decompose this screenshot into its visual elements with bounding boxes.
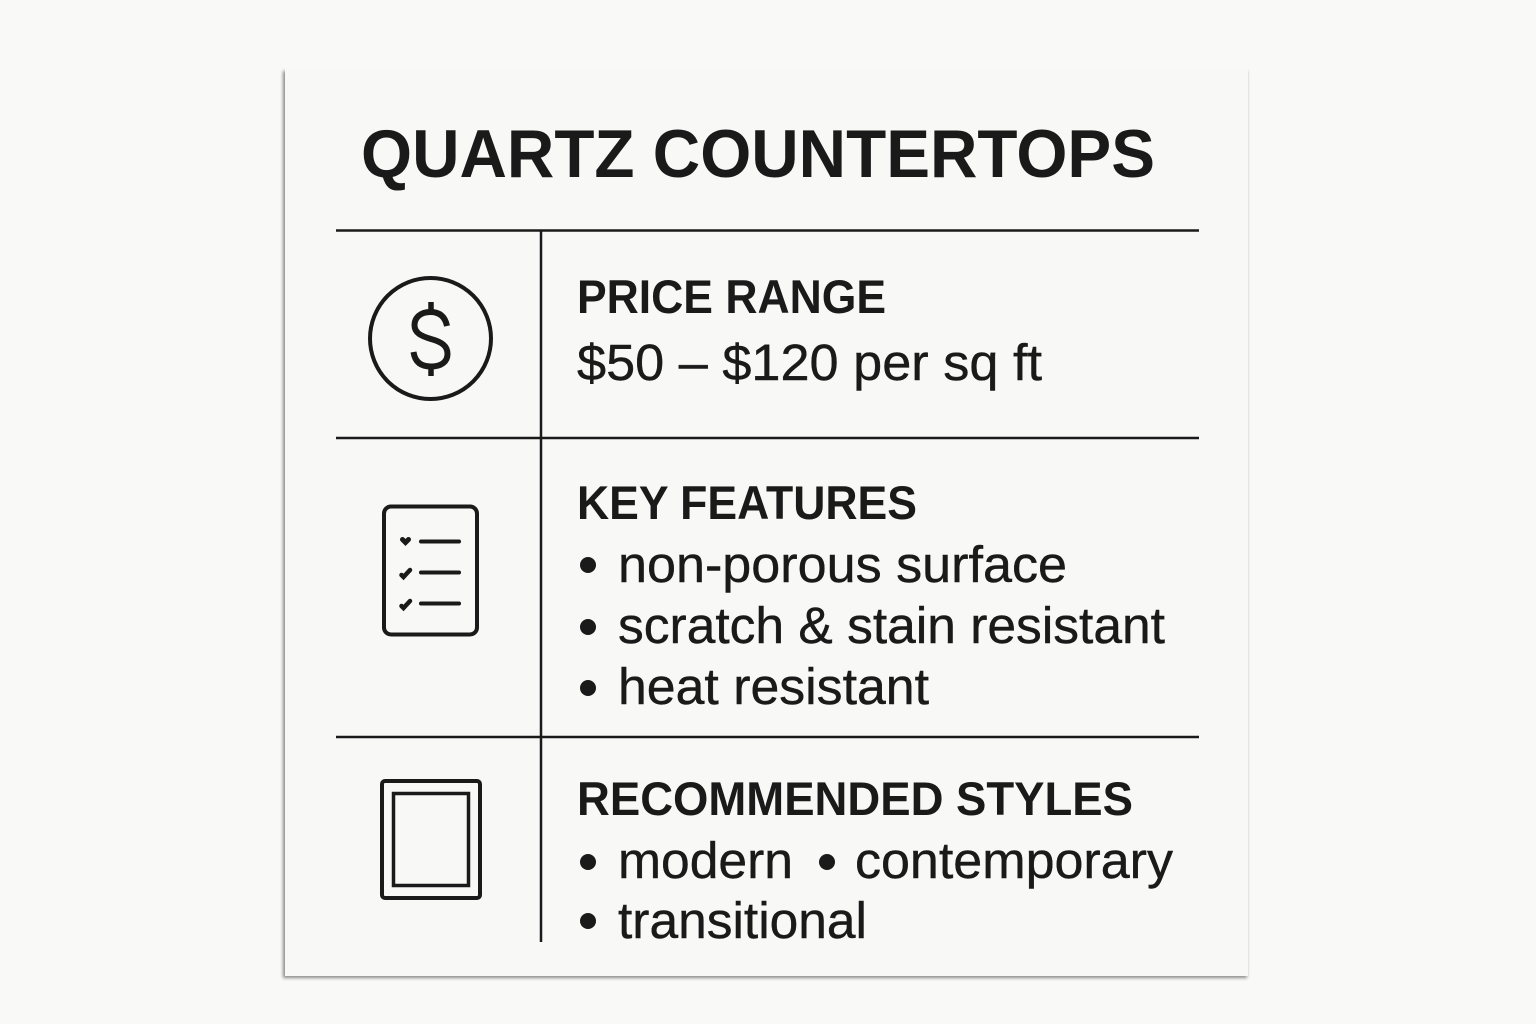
list: styles: modern <box>618 832 793 889</box>
icon: checklist <box>384 506 477 634</box>
list: styles: contemporary <box>855 832 1173 889</box>
heading: price range: PRICE RANGE <box>577 270 886 323</box>
icon: frame <box>382 781 480 898</box>
list: features: heat resistant <box>618 658 929 715</box>
panel: card <box>285 67 1248 976</box>
list: styles: transitional <box>618 892 867 949</box>
icon: dollar coin <box>370 278 491 399</box>
title: QUARTZ COUNTERTOPS <box>361 116 1155 192</box>
text: price value: $50 – $120 per sq ft <box>577 334 1042 391</box>
heading: key features: KEY FEATURES <box>577 476 917 529</box>
list: features: scratch & stain resistant <box>618 597 1165 654</box>
list: features <box>580 536 1165 715</box>
heading: recommended styles: RECOMMENDED STYLES <box>577 772 1133 825</box>
list: features: non-porous surface <box>618 536 1067 593</box>
list: styles <box>580 832 1173 949</box>
